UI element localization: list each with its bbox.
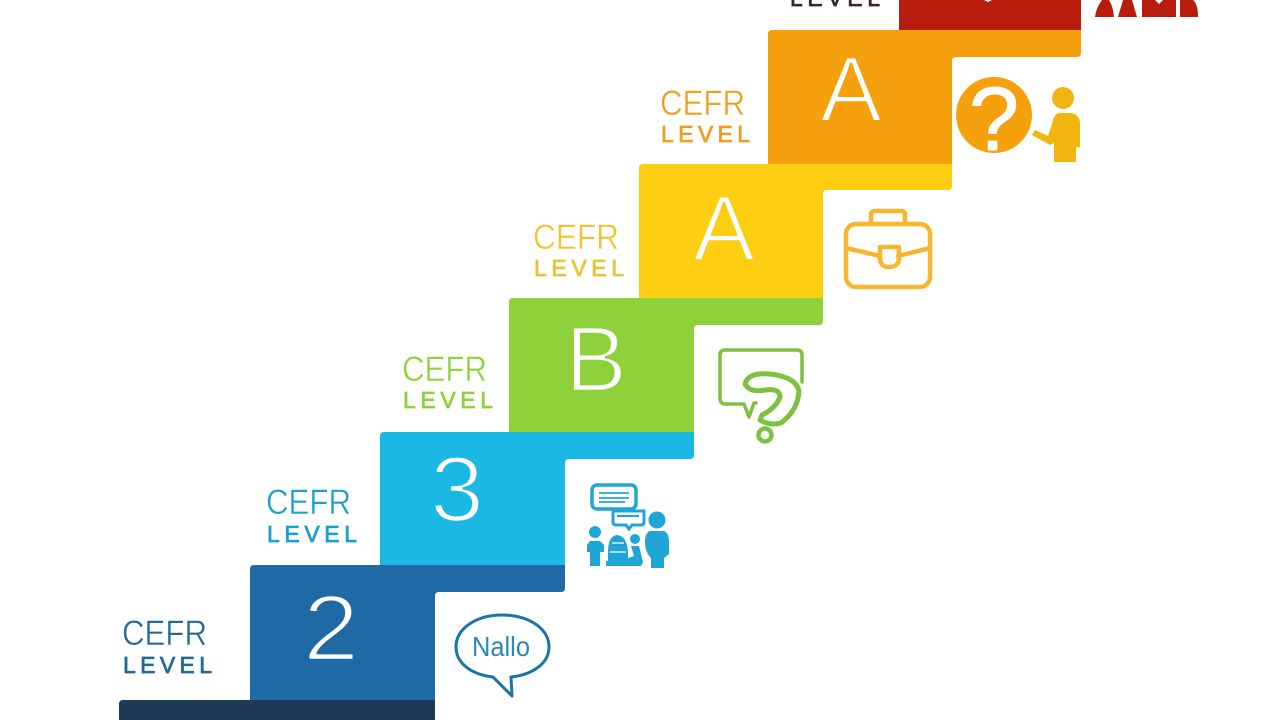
icon: Hallo speech bubble: Nallo (472, 631, 530, 662)
letter A: A (820, 37, 882, 141)
label: CEFR level cyan: LEVEL (267, 521, 357, 547)
label: CEFR level yellow (533, 218, 624, 281)
label: CEFR level green: LEVEL (403, 387, 493, 413)
step: green B (509, 298, 823, 432)
label: CEFR level yellow: CEFR (533, 218, 619, 257)
label: CEFR level orange (660, 84, 750, 147)
icon: briefcase (846, 211, 930, 287)
step: blue 2 (250, 565, 565, 700)
label: CEFR level blue (122, 614, 212, 678)
icon: question mark and person (956, 70, 1080, 170)
label: CEFR level green: CEFR (402, 350, 487, 389)
digit 2: 2 (303, 576, 359, 680)
icon: speech bubble with question mark (720, 350, 802, 442)
icon: red group of people (1095, 0, 1198, 17)
label: CEFR level yellow: LEVEL (534, 255, 624, 281)
digit 3: 3 (430, 437, 484, 541)
icon: question mark and person: ? (969, 70, 1019, 170)
label: CEFR level blue: LEVEL (123, 652, 212, 678)
step: top red (899, 0, 1081, 30)
label: CEFR level cyan (266, 483, 357, 547)
step: cyan 3 (380, 432, 694, 565)
label: CEFR level green (402, 350, 493, 413)
step: yellow A (639, 164, 952, 298)
icon: Hallo speech bubble (456, 615, 549, 696)
letter B: B (565, 307, 627, 411)
step: dark base (119, 700, 435, 720)
label: CEFR level cyan: CEFR (266, 483, 351, 522)
label: CEFR level orange: CEFR (660, 84, 745, 123)
letter A: A (693, 176, 755, 280)
label: CEFR level orange: LEVEL (661, 121, 750, 147)
icon: group conversation (587, 485, 669, 568)
label: CEFR level blue: CEFR (122, 614, 207, 653)
step: orange A (768, 30, 1081, 164)
